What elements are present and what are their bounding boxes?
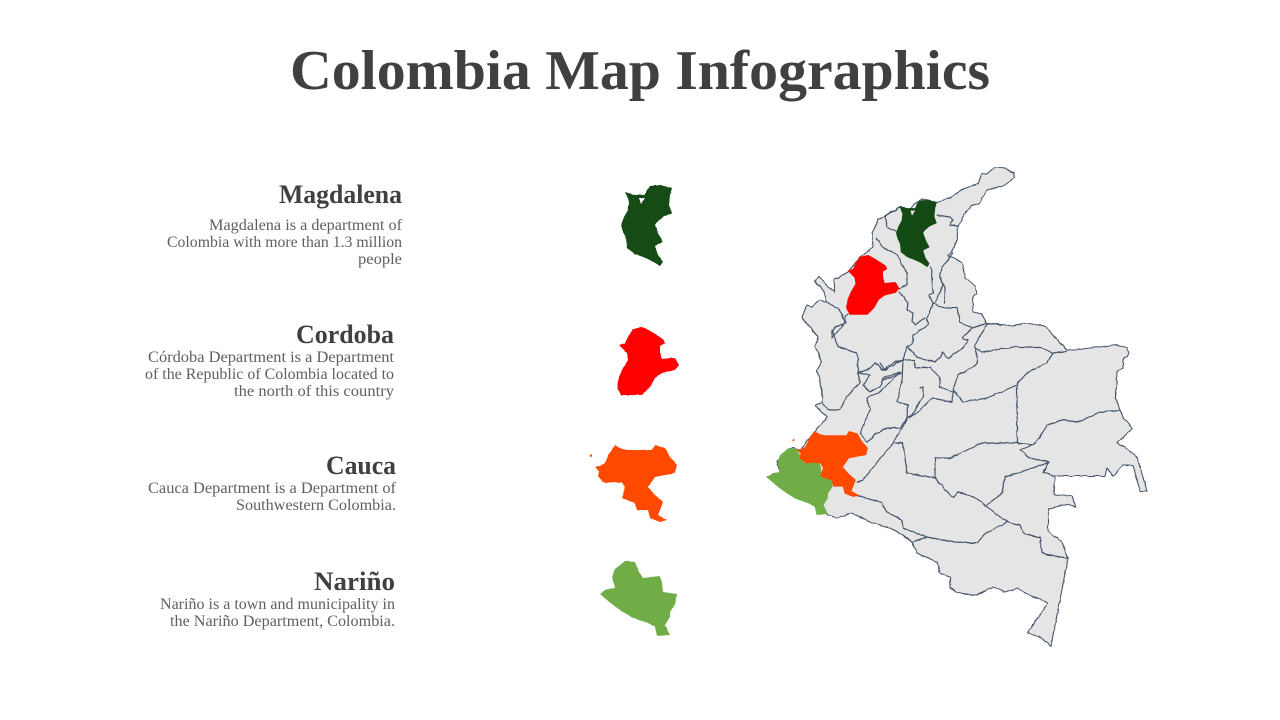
icon: Cauca department shape [589, 445, 677, 522]
description: Cordoba: the north of this country [234, 383, 394, 400]
map of Colombia [767, 167, 1147, 646]
description: Cordoba: Córdoba Department is a Department [148, 349, 395, 366]
description: Cauca: Cauca Department is a Department of [148, 480, 397, 497]
text block: Cauca [148, 451, 397, 514]
title: Colombia Map Infographics [290, 40, 990, 102]
description: Cordoba: of the Republic of Colombia located to [145, 366, 394, 383]
description: Nariño: the Nariño Department, Colombia. [170, 613, 395, 630]
description: Cauca: Southwestern Colombia. [236, 497, 396, 514]
highlight: Cordoba [846, 255, 899, 315]
heading: Magdalena: Magdalena [279, 180, 402, 209]
icon: Magdalena department shape [621, 185, 672, 266]
heading: Cordoba: Cordoba [296, 320, 394, 349]
description: Nariño [160, 596, 395, 630]
highlight: Nariño [767, 448, 834, 515]
description: Nariño: Nariño is a town and municipality in [160, 596, 395, 613]
description: Magdalena [167, 217, 403, 268]
description: Cauca [148, 480, 397, 514]
description: Magdalena: people [358, 251, 402, 268]
description: Magdalena: Magdalena is a department of [209, 217, 403, 234]
text block: Cordoba [145, 320, 395, 400]
text block: Magdalena [167, 180, 403, 268]
heading: Nariño: Nariño [314, 567, 395, 596]
highlight: Magdalena [896, 200, 937, 267]
heading: Cauca: Cauca [326, 451, 396, 480]
text block: Nariño [160, 567, 395, 630]
highlight: Cauca [792, 431, 868, 497]
description: Cordoba [145, 349, 395, 400]
description: Magdalena: Colombia with more than 1.3 million [167, 234, 402, 251]
country outline and department borders [767, 167, 1147, 646]
icon: Cordoba department shape [617, 327, 679, 395]
icon: Nariño department shape [600, 561, 677, 636]
